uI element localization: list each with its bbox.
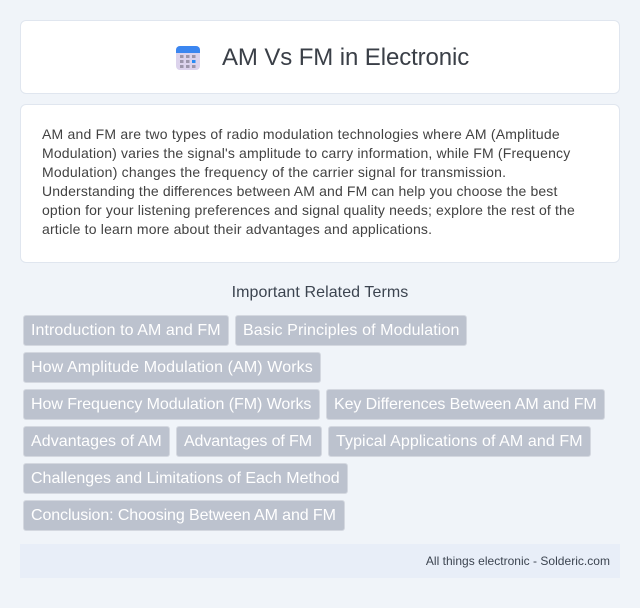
tag: Typical Applications of AM and FM [336, 433, 583, 450]
tag: Introduction to AM and FM [31, 322, 221, 339]
tag [23, 500, 345, 531]
tag [328, 426, 591, 457]
tag [23, 426, 170, 457]
tag: Conclusion: Choosing Between AM and FM [31, 507, 336, 524]
tag [326, 389, 605, 420]
intro text: AM and FM are two types of radio modulation technologies where AM (Amplitude [42, 126, 560, 142]
title card [20, 20, 620, 94]
tag: Challenges and Limitations of Each Method [31, 470, 340, 487]
tag [23, 389, 320, 420]
intro paragraph card [20, 104, 620, 263]
intro text: article to learn more about their advantages and applications. [42, 221, 432, 237]
tag: Advantages of FM [184, 433, 312, 450]
tag [23, 352, 321, 383]
tag: How Amplitude Modulation (AM) Works [31, 359, 313, 376]
footer bar [20, 544, 620, 578]
title: AM Vs FM in Electronic [222, 44, 469, 71]
related terms heading: Important Related Terms [232, 284, 408, 301]
tag: Advantages of AM [31, 433, 162, 450]
intro text [42, 126, 575, 237]
intro text: Modulation) varies the signal's amplitude to carry information, while FM (Frequency [42, 145, 570, 161]
icon: calendar [176, 46, 200, 70]
tag: Basic Principles of Modulation [243, 322, 459, 339]
tag [176, 426, 322, 457]
intro text: Understanding the differences between AM and FM can help you choose the best [42, 183, 557, 199]
tag [23, 463, 348, 494]
tag [235, 315, 467, 346]
tag: How Frequency Modulation (FM) Works [31, 396, 311, 413]
intro text: Modulation) changes the frequency of the carrier signal for transmission. [42, 164, 506, 180]
related terms tags [23, 315, 605, 531]
tag: Key Differences Between AM and FM [334, 396, 597, 413]
tag [23, 315, 229, 346]
footer text: All things electronic - Solderic.com [426, 554, 610, 568]
intro text: option for your listening preferences and signal quality needs; explore the rest of the [42, 202, 575, 218]
